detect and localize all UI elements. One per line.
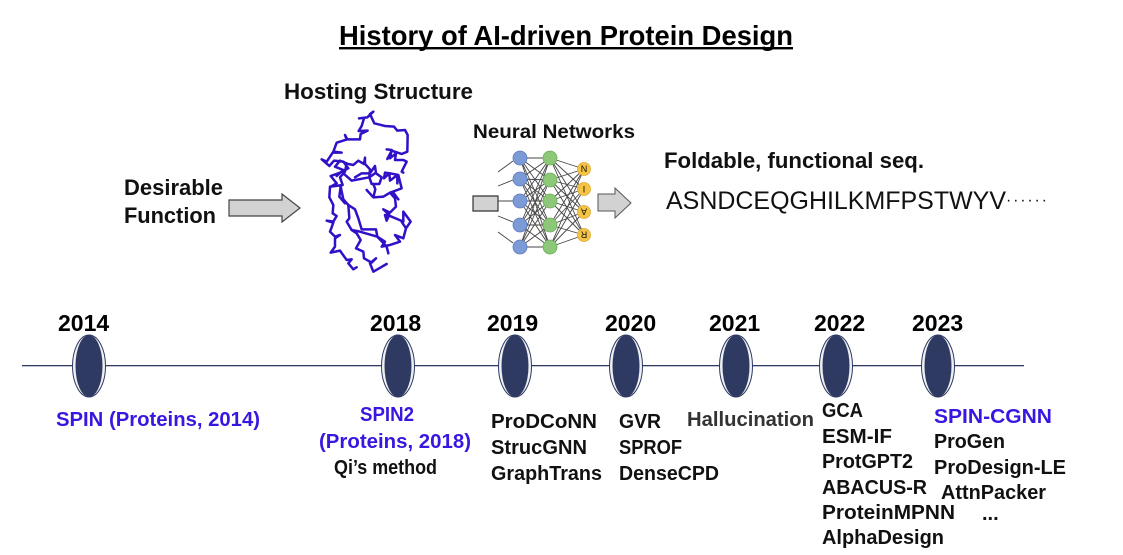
methods 2021: Hallucination xyxy=(687,409,814,431)
title: History of AI-driven Protein Design xyxy=(339,20,793,51)
methods 2020: SPROF xyxy=(619,437,682,459)
methods 2022: ProteinMPNN xyxy=(822,502,955,524)
methods 2023 xyxy=(934,406,1066,525)
year labels: 2019 xyxy=(487,310,538,336)
methods 2018: SPIN2 xyxy=(360,404,414,426)
year labels: 2022 xyxy=(814,310,865,336)
heading: hosting structure: Hosting Structure xyxy=(284,79,473,104)
year labels: 2018 xyxy=(370,310,421,336)
methods 2022: ProtGPT2 xyxy=(822,451,913,473)
timeline marker: 2018 xyxy=(382,335,414,397)
methods 2020: GVR xyxy=(619,411,662,433)
timeline marker: 2021 xyxy=(720,335,752,397)
methods 2023: SPIN-CGNN xyxy=(934,406,1052,428)
year labels xyxy=(58,310,963,336)
timeline marker: 2023 xyxy=(922,335,954,397)
methods 2020: DenseCPD xyxy=(619,463,719,485)
methods 2019: GraphTrans xyxy=(491,463,602,485)
methods 2020 xyxy=(619,411,719,485)
heading: neural networks: Neural Networks xyxy=(473,122,635,143)
methods 2019: ProDCoNN xyxy=(491,411,597,433)
timeline marker: 2019 xyxy=(498,335,532,397)
icon: neural network diagram: I xyxy=(583,184,585,194)
text: desirable function: Function xyxy=(124,203,216,228)
year labels: 2014 xyxy=(58,310,109,336)
timeline axis xyxy=(22,365,1024,366)
year labels: 2020 xyxy=(605,310,656,336)
methods 2018: Qi’s method xyxy=(334,457,437,479)
methods 2023: AttnPacker xyxy=(941,482,1046,504)
year labels: 2023 xyxy=(912,310,963,336)
arrow: function to structure xyxy=(229,194,300,222)
text: amino acid sequence: ASNDCEQGHILKMFPSTWYV xyxy=(666,187,1006,215)
icon: neural network diagram: N xyxy=(581,164,587,174)
methods 2019: StrucGNN xyxy=(491,437,587,459)
methods 2018: (Proteins, 2018) xyxy=(319,431,471,453)
year labels: 2021 xyxy=(709,310,760,336)
icon: neural network diagram: R xyxy=(580,230,587,240)
icon: neural network diagram: A xyxy=(581,206,587,216)
timeline marker: 2014 xyxy=(72,335,106,397)
methods 2014: SPIN (Proteins, 2014) xyxy=(56,409,260,431)
methods 2022: AlphaDesign xyxy=(822,527,944,549)
methods 2019 xyxy=(491,411,602,485)
text: amino acid sequence: ······ xyxy=(1006,192,1047,209)
methods 2022 xyxy=(822,400,955,549)
arrow: structure to network xyxy=(473,196,498,211)
icon: neural network diagram xyxy=(498,151,590,254)
methods 2018 xyxy=(319,404,471,479)
methods 2022: ESM-IF xyxy=(822,426,892,448)
timeline marker: 2020 xyxy=(610,335,642,397)
methods 2023: ProGen xyxy=(934,431,1005,453)
text: desirable function: Desirable xyxy=(124,175,223,200)
heading: foldable functional sequence: Foldable, functional seq. xyxy=(664,148,924,173)
arrow: network to sequence xyxy=(598,188,631,218)
text: desirable function xyxy=(124,175,223,228)
methods 2022: GCA xyxy=(822,400,863,422)
timeline marker: 2022 xyxy=(820,335,852,397)
icon: protein backbone structure xyxy=(322,112,411,272)
methods 2023: ProDesign-LE xyxy=(934,457,1066,479)
methods 2022: ABACUS-R xyxy=(822,477,928,499)
methods 2023: ... xyxy=(982,503,999,525)
